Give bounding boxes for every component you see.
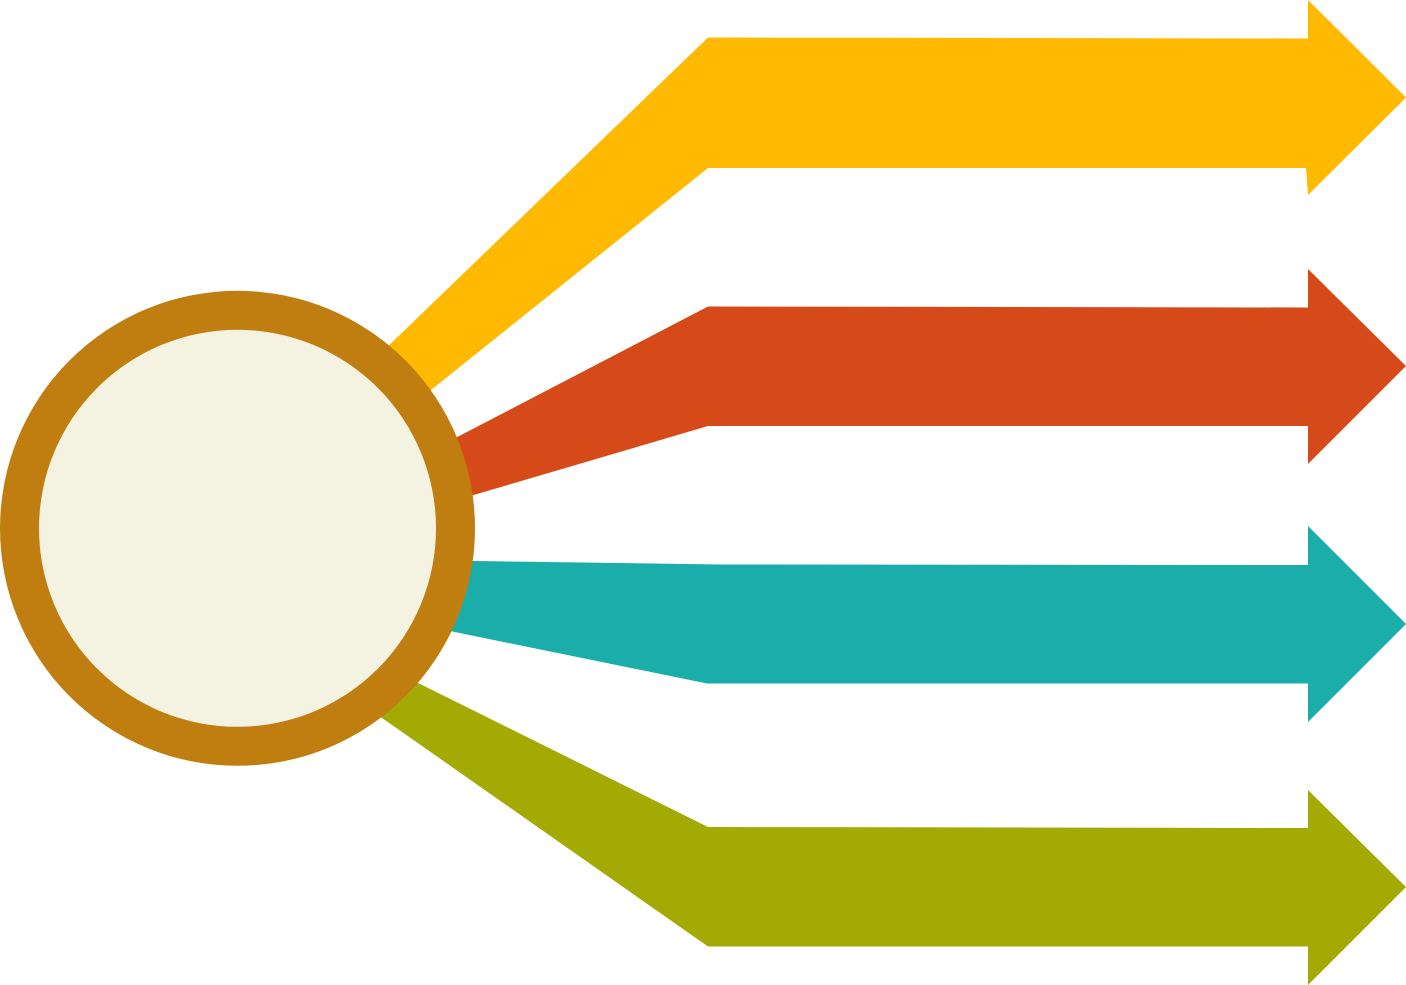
- circle: outer ring and inner disc: [0, 291, 475, 766]
- arrow: teal: [440, 526, 1406, 722]
- arrow: olive green: [370, 674, 1406, 985]
- arrow: orange-red: [440, 269, 1406, 499]
- arrow: yellow: [382, 0, 1406, 398]
- circle ring: [0, 291, 475, 766]
- circle inner disc: [39, 330, 436, 727]
